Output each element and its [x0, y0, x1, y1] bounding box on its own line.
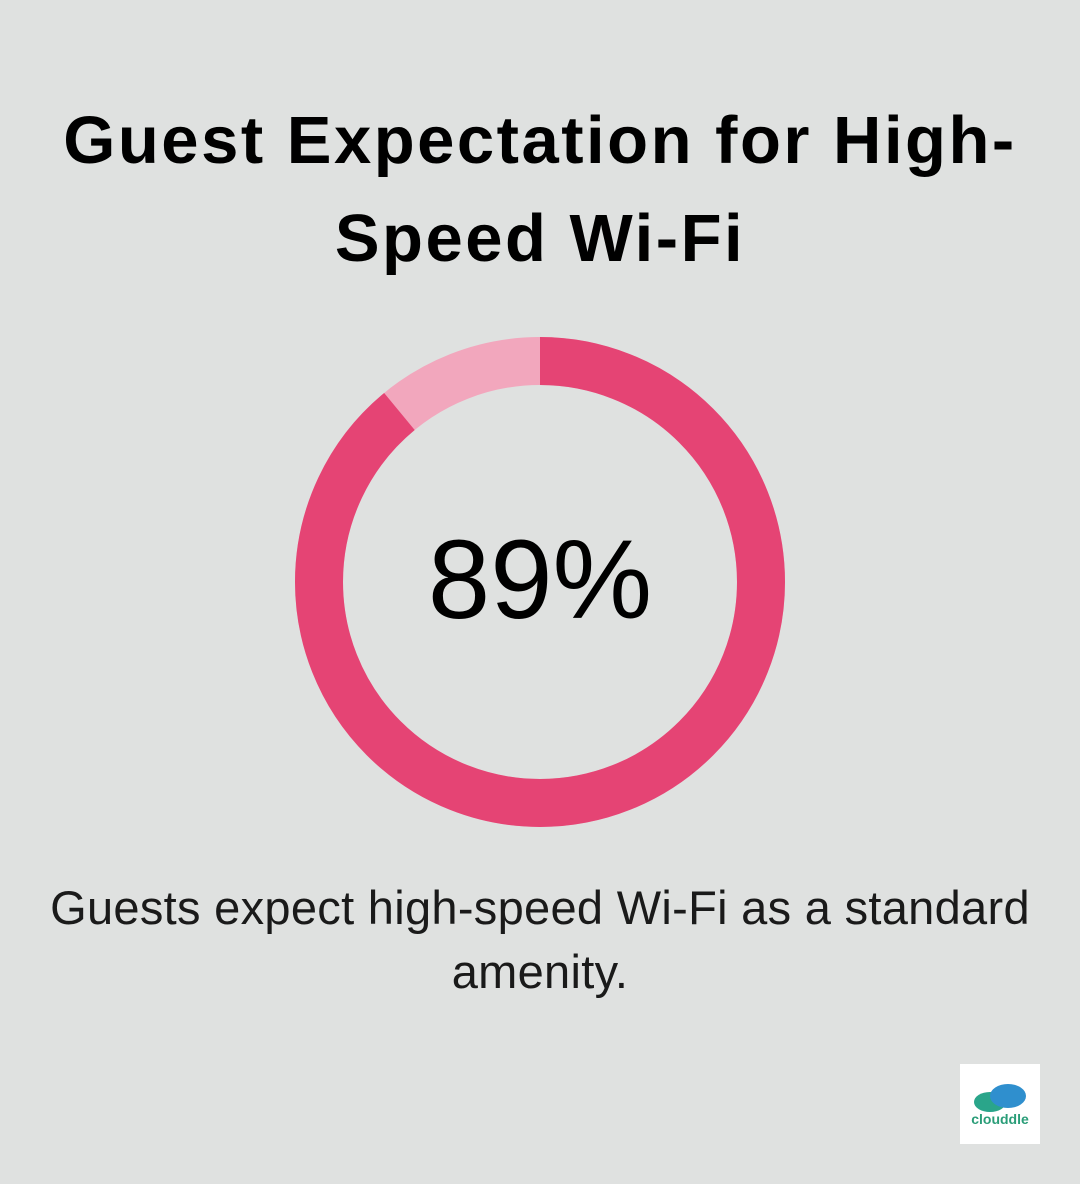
title: Speed Wi-Fi [335, 201, 745, 276]
description: amenity. [452, 945, 628, 998]
logo [960, 1064, 1040, 1144]
logo: clouddle [971, 1111, 1029, 1127]
title: Guest Expectation for High- [63, 103, 1017, 178]
percentage: 89% [428, 517, 652, 642]
description [50, 881, 1030, 998]
description: Guests expect high-speed Wi-Fi as a standard [50, 881, 1030, 934]
donut chart [295, 337, 785, 827]
title [63, 103, 1017, 276]
